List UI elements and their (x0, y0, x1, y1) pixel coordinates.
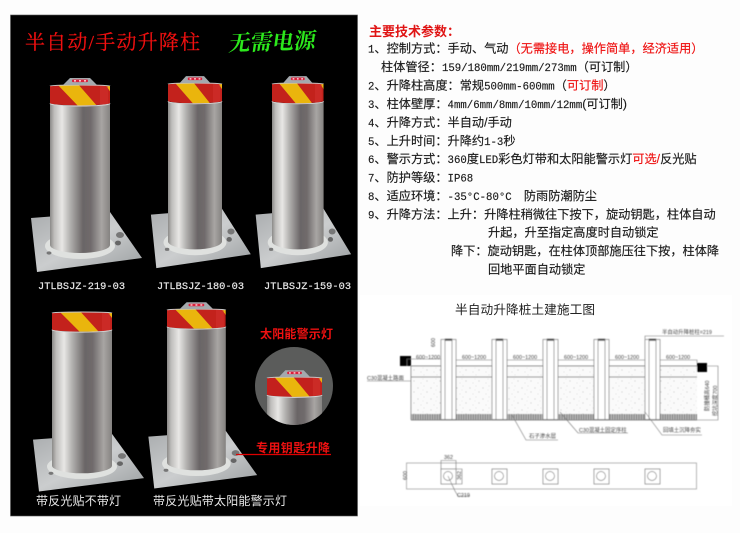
label: model 219: JTLBSJZ-219-03 (38, 281, 125, 293)
title: product name: 半自动/手动升降柱 (25, 31, 200, 54)
detail circle: solar light close-up (255, 347, 333, 425)
text block: specification list: 柱体管径：159/180mm/219mm/273mm（可订制） (381, 59, 638, 75)
plan view drawing: 362 (457, 471, 463, 480)
text block: specification list: 回地平面自动锁定 (488, 262, 586, 276)
panel: product photos (10, 15, 358, 533)
drawing title: 半自动升降桩土建施工图 (455, 303, 595, 317)
section view drawing: 600~1200 (462, 355, 486, 361)
section view drawing: 半自动升降桩柱=219 (662, 328, 712, 336)
text block: specification list: 1、控制方式：手动、气动（无需接电，操作简单，经济适用） (368, 40, 703, 56)
text block: specification list: 2、升降柱高度：常规500mm-600mm（可订制） (368, 78, 616, 94)
section view drawing: 600~1200 (615, 355, 639, 361)
bollard: 180 model (151, 76, 251, 268)
plan view drawing (403, 455, 696, 499)
bollard: 159 model (256, 76, 351, 268)
text block: specification list: 8、适应环境：-35°C-80°C 防雨防潮防尘 (368, 188, 597, 204)
section view drawing: 600~1200 (564, 355, 588, 361)
text block: specification list: 升起，升至指定高度时自动锁定 (488, 224, 659, 240)
panel: civil construction drawing (360, 295, 732, 506)
label: model 159: JTLBSJZ-159-03 (264, 281, 351, 293)
text block: specification list: 5、上升时间：升降约1-3秒 (368, 133, 516, 149)
section view drawing: 石子渗水层 (529, 432, 557, 440)
text block: specification list: 9、升降方法：上升：升降柱稍微往下按下，旋动钥匙，柱体自动 (368, 206, 716, 222)
section view drawing: 600~1200 (666, 355, 690, 361)
plan view drawing: 362 (444, 455, 453, 461)
section view drawing: 挖坑深度700 (711, 385, 719, 416)
section view drawing: 600~1200 (416, 355, 440, 361)
text block: specification list: 降下：旋动钥匙，在柱体顶部施压往下按，柱体降 (451, 243, 719, 258)
plan view drawing: 600 (403, 471, 409, 480)
section view drawing: C30混凝土固定序柱 (579, 426, 627, 434)
heading: main technical parameters: 主要技术参数： (369, 24, 460, 39)
callout: dedicated key lift: 专用钥匙升降 (256, 440, 330, 455)
slogan: no power required: 无需电源 (227, 28, 320, 56)
label: sticker without light: 带反光贴不带灯 (36, 494, 121, 508)
section view drawing: 600 (431, 338, 437, 347)
label: model 180: JTLBSJZ-180-03 (157, 281, 244, 293)
text block: specification list: 6、警示方式：360度LED彩色灯带和太阳能警示灯可选/反光贴 (368, 151, 697, 167)
section view drawing: C30混凝土路面 (367, 374, 404, 382)
text block: specification list: 4、升降方式：半自动/手动 (368, 114, 512, 130)
bollard: reflective sticker with solar light (148, 302, 257, 489)
bollard: 219 model (31, 78, 142, 272)
label: solar warning light: 太阳能警示灯 (260, 326, 333, 341)
text block: specification list (368, 40, 719, 276)
text block: specification list: 7、防护等级：IP68 (368, 170, 473, 186)
section view drawing: 600~1200 (513, 355, 537, 361)
section view drawing: 防撞桶高640 (703, 380, 711, 411)
text block: specification list: 3、柱体壁厚：4mm/6mm/8mm/10mm/12mm(可订制) (368, 96, 627, 112)
bollard: reflective sticker without light (33, 310, 144, 492)
section view drawing: 回填土沉降夯实 (663, 426, 701, 434)
label: sticker with solar light: 带反光贴带太阳能警示灯 (153, 493, 287, 508)
section view drawing (367, 328, 724, 440)
plan view drawing: C219 (457, 493, 470, 499)
